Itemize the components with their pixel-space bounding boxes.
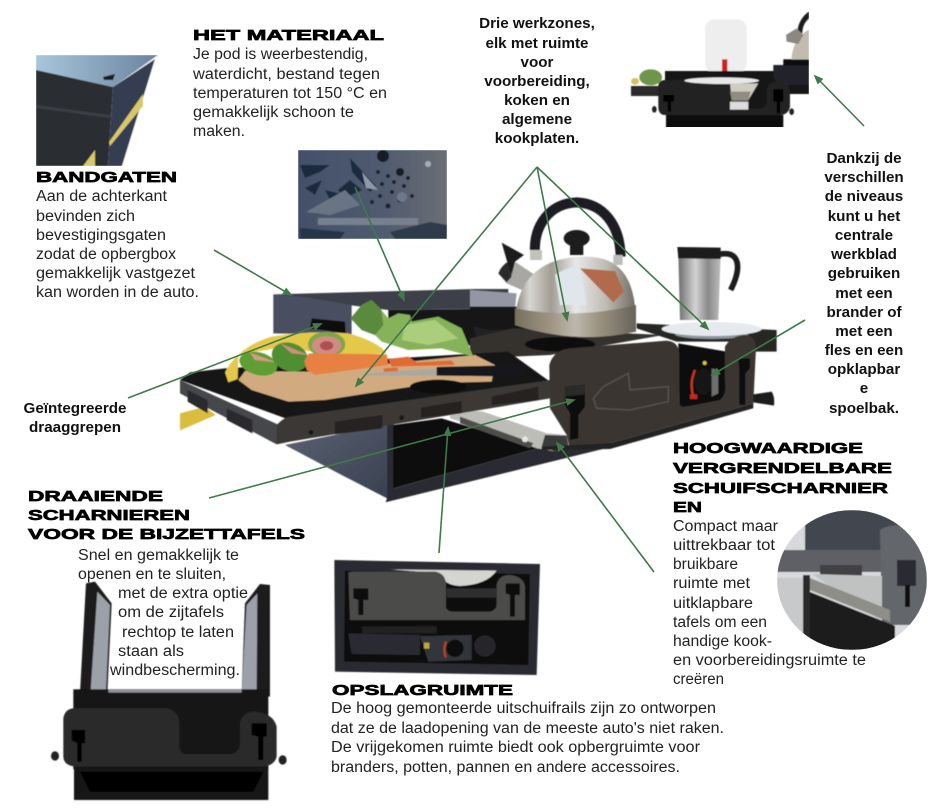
- text: compact maar uittrekbaar: uitklapbare: [673, 595, 753, 612]
- end panel, burner controls and handles: [542, 335, 774, 450]
- photo: central worktop with sink: [631, 12, 809, 128]
- text: het materiaal: gemakkelijk schoon te: [193, 104, 354, 121]
- arrow: werkzone plaat: [537, 167, 708, 329]
- text: compact maar uittrekbaar: handige kook-: [673, 633, 772, 650]
- text: bandgaten: bevestigingsgaten: [36, 227, 166, 244]
- kettle, mug and plate: [498, 202, 762, 339]
- arrow: schuifscharnieren: [557, 443, 654, 572]
- text: compact maar uittrekbaar: tafels om een: [673, 614, 767, 631]
- text: drie werkzones: elk met ruimte: [486, 35, 588, 52]
- heading: draaiende scharnieren: VOOR DE BIJZETTAFELS: [28, 526, 305, 543]
- text: drie werkzones: kookplaten.: [495, 130, 579, 147]
- text: drie werkzones: algemene: [502, 111, 572, 128]
- photo: strap holes at the back of the box: [36, 55, 158, 166]
- text: drie werkzones: voor: [521, 54, 554, 71]
- text: compact maar uittrekbaar: [673, 518, 866, 688]
- text: snel en gemakkelijk: [78, 547, 248, 679]
- text: geintegreerde draaggrepen: draaggrepen: [29, 419, 121, 436]
- heading: hoogwaardige schuifscharnieren: EN: [673, 499, 702, 516]
- text: bandgaten: kan worden in de auto.: [36, 284, 199, 301]
- text: dankzij de verschillen: verschillen: [824, 169, 904, 186]
- text: drie werkzones: voorbereiding,: [484, 73, 590, 90]
- text: bandgaten: zodat de opbergbox: [36, 246, 176, 263]
- photo: water droplets on material: [298, 150, 447, 239]
- heading: draaiende scharnieren: DRAAIENDE: [28, 488, 163, 505]
- text: compact maar uittrekbaar: Compact maar: [673, 518, 778, 535]
- text: dankzij de verschillen: centrale: [835, 227, 893, 244]
- heading: hoogwaardige schuifscharnieren: VERGRENDELBARE: [673, 460, 892, 477]
- text: het materiaal: temperaturen tot 150 °C en: [193, 85, 387, 102]
- text: dankzij de verschillen: met een: [835, 285, 893, 302]
- text: snel en gemakkelijk: Snel en gemakkelijk te: [78, 547, 239, 564]
- heading: hoogwaardige schuifscharnieren: SCHUIFSCHARNIER: [673, 480, 888, 497]
- stove surface and right shelf: [470, 290, 777, 408]
- heading: bandgaten: BANDGATEN: [36, 169, 177, 186]
- text: dankzij de verschillen: kunt u het: [828, 208, 900, 225]
- arrow: brander: [712, 320, 805, 375]
- text: dankzij de verschillen: met een: [835, 323, 893, 340]
- text: opslagruimte: De vrijgekomen ruimte biedt ook opbergruimte voor: [331, 739, 700, 756]
- food on the cutting board: [225, 300, 524, 382]
- text: compact maar uittrekbaar: ruimte met: [673, 575, 751, 592]
- heading: hoogwaardige schuifscharnieren: HOOGWAARDIGE: [673, 440, 863, 457]
- text: bandgaten: bevinden zich: [36, 208, 135, 225]
- text: het materiaal: [192, 46, 387, 140]
- text: opslagruimte: branders, potten, pannen en andere accessoires.: [331, 759, 680, 776]
- arrow: opslagruimte: [439, 428, 448, 553]
- text: compact maar uittrekbaar: en voorbereidingsruimte te: [673, 652, 866, 669]
- text: snel en gemakkelijk: openen en te sluiten,: [78, 566, 226, 583]
- arrow: werkzone snijplank: [356, 167, 537, 386]
- text: compact maar uittrekbaar: creëren: [673, 671, 724, 688]
- text: drie werkzones: Drie werkzones,: [479, 15, 595, 32]
- heading: opslagruimte: OPSLAGRUIMTE: [332, 682, 513, 699]
- photo: slide rail in circle: [777, 510, 927, 650]
- text: snel en gemakkelijk: staan als: [118, 643, 184, 660]
- text: het materiaal: maken.: [193, 123, 245, 140]
- text: dankzij de verschillen: [824, 150, 904, 417]
- text: dankzij de verschillen: Dankzij de: [826, 150, 902, 167]
- tray and cutting board: [180, 352, 550, 444]
- photo: pod with raised side tables: [51, 582, 287, 800]
- text: dankzij de verschillen: werkblad: [830, 246, 897, 263]
- text: snel en gemakkelijk: om de zijtafels: [118, 604, 224, 621]
- back box and lower box: [180, 289, 611, 502]
- text: bandgaten: Aan de achterkant: [36, 188, 168, 205]
- text: dankzij de verschillen: e: [860, 380, 868, 397]
- text: dankzij de verschillen: spoelbak.: [829, 400, 899, 417]
- text: geintegreerde draaggrepen: [24, 400, 126, 436]
- text: bandgaten: gemakkelijk vastgezet: [36, 265, 196, 282]
- arrow: werkzone kookplaat: [537, 167, 567, 320]
- text: geintegreerde draaggrepen: Geïntegreerde: [24, 400, 126, 417]
- text: compact maar uittrekbaar: uittrekbaar tot: [673, 537, 776, 554]
- text: het materiaal: waterdicht, bestand tegen: [192, 66, 380, 83]
- text: dankzij de verschillen: fles en een: [825, 342, 903, 359]
- rail: [450, 408, 568, 452]
- heading: hoogwaardige schuifscharnieren: [673, 440, 892, 516]
- text: snel en gemakkelijk: rechtop te laten: [122, 624, 234, 641]
- arrow: bandgaten: [214, 250, 291, 295]
- text: het materiaal: Je pod is weerbestendig,: [193, 46, 368, 63]
- text: opslagruimte: De hoog gemonteerde uitschuifrails zijn zo ontworpen: [331, 700, 716, 717]
- text: drie werkzones: [479, 15, 595, 147]
- main illustration: pull-out kitchen pod: [180, 202, 777, 502]
- text: dankzij de verschillen: de niveaus: [825, 188, 903, 205]
- text: opslagruimte: [331, 700, 724, 776]
- arrow: werkblad foto: [815, 76, 864, 126]
- heading: draaiende scharnieren: SCHARNIEREN: [28, 507, 190, 524]
- heading: draaiende scharnieren: [28, 488, 305, 543]
- text: compact maar uittrekbaar: bruikbare: [673, 556, 738, 573]
- text: dankzij de verschillen: opklapbar: [828, 361, 900, 378]
- text: dankzij de verschillen: gebruiken: [828, 265, 900, 282]
- text: snel en gemakkelijk: met de extra optie: [118, 585, 248, 602]
- heading: het materiaal: HET MATERIAAL: [193, 27, 384, 44]
- text: bandgaten: [36, 188, 199, 301]
- arrow: draaggrepen: [128, 324, 321, 398]
- photo: storage space with stove: [334, 560, 540, 675]
- text: snel en gemakkelijk: windbescherming.: [109, 662, 240, 679]
- arrow: scharnieren: [209, 400, 574, 498]
- arrow: materiaal: [355, 187, 404, 300]
- text: opslagruimte: dat ze de laadopening van de meeste auto's niet raken.: [331, 720, 724, 737]
- text: drie werkzones: koken en: [504, 92, 570, 109]
- text: dankzij de verschillen: brander of: [826, 304, 902, 321]
